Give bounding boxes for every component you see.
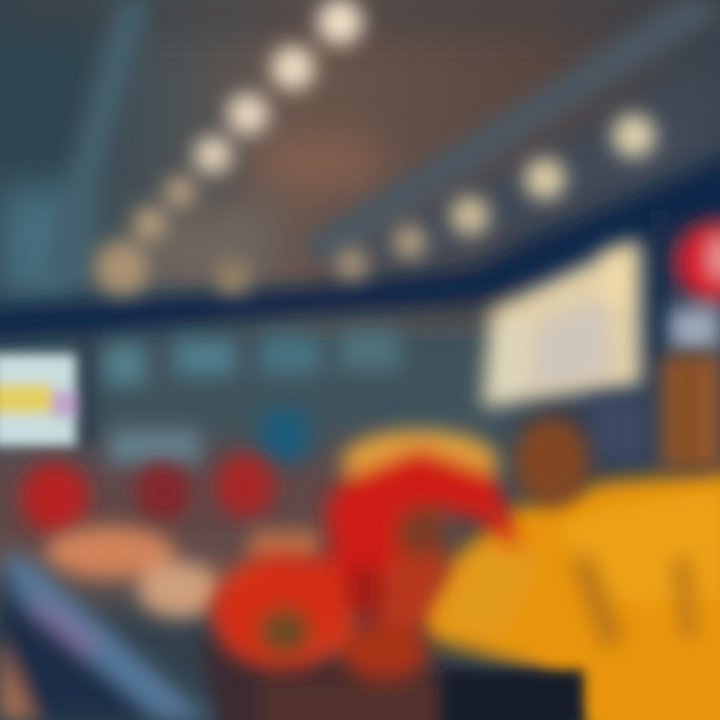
tan crowd band xyxy=(45,526,320,618)
red round sign xyxy=(670,222,720,350)
red crowd figures xyxy=(21,454,275,533)
dark shape bottom xyxy=(442,670,584,720)
orange jersey player xyxy=(412,470,720,720)
ceiling lights xyxy=(94,0,656,296)
bottom left dark table xyxy=(0,552,460,720)
ceiling beams xyxy=(40,0,720,280)
upper seating and wall xyxy=(0,230,720,600)
dark blue beam xyxy=(0,150,720,445)
red player xyxy=(210,430,520,682)
crowd blue patches xyxy=(105,330,650,465)
brown head and post xyxy=(514,355,720,508)
left scoreboard xyxy=(0,354,78,446)
ceiling xyxy=(0,0,720,340)
big screen xyxy=(482,238,642,408)
